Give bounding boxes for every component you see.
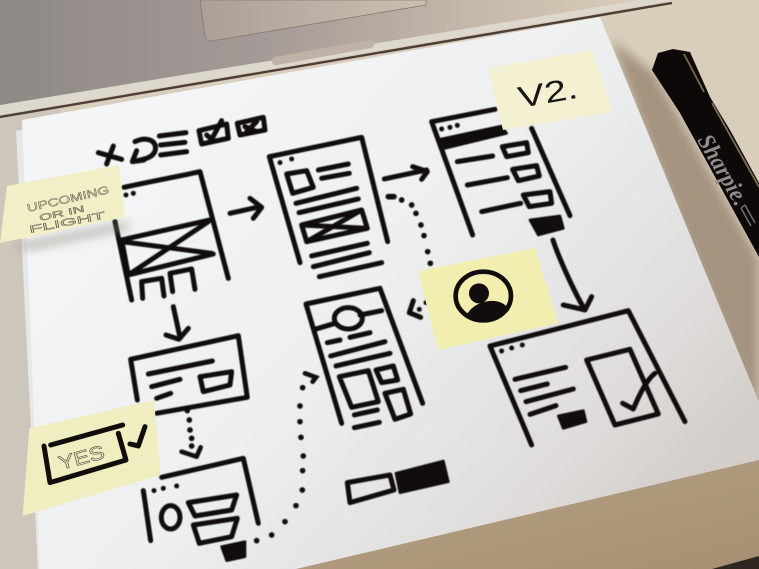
sketches on the paper [98,109,685,561]
sticky note: upcoming [0,165,132,250]
wireframe: confirmation screen [490,311,685,445]
arrow: dotted curve to profile [257,373,316,541]
V2 label: V2. [515,72,580,115]
note text [26,184,111,236]
laptop front lip [0,0,675,115]
check mark [130,427,145,446]
arrow: right to article [230,198,262,218]
note text: UPCOMING [26,184,111,215]
sticky note: profile avatar [418,248,558,350]
wireframe: profile page [306,288,423,428]
wireframe: text document [269,137,388,277]
desk bottom right [280,450,759,569]
wireframe: article with hero image [115,172,228,300]
arrow: dotted left to profile [409,301,426,317]
dark object in corner [712,556,759,569]
sharpie marker [652,49,759,257]
arrow: down to dialog [166,307,188,339]
yes button sketch [44,425,126,483]
desk shadow right of paper [612,40,759,420]
wireframe: form page [143,458,258,561]
wireframe: dialog [131,336,247,413]
dotted connector to profile [388,197,430,263]
desk left strip [0,100,60,569]
marker brand: Sharpie. [692,130,753,211]
note text: OR IN [38,204,85,223]
under sheet of paper [16,126,42,569]
yes text: YES [57,442,107,475]
icon: profile avatar [456,272,511,320]
arrow: right to list [384,167,427,179]
laptop [0,0,675,117]
note text: FLIGHT [28,210,106,236]
laptop trackpad [200,0,426,41]
wireframe: list view [432,109,570,235]
arrow: dotted down [182,411,201,457]
sticky note: V2 [487,50,613,130]
button pair [347,461,448,503]
toolbar icons [98,117,265,164]
arrow: down to confirmation [553,240,592,310]
laptop notch [276,44,370,61]
sticky note: yes button [23,400,161,516]
